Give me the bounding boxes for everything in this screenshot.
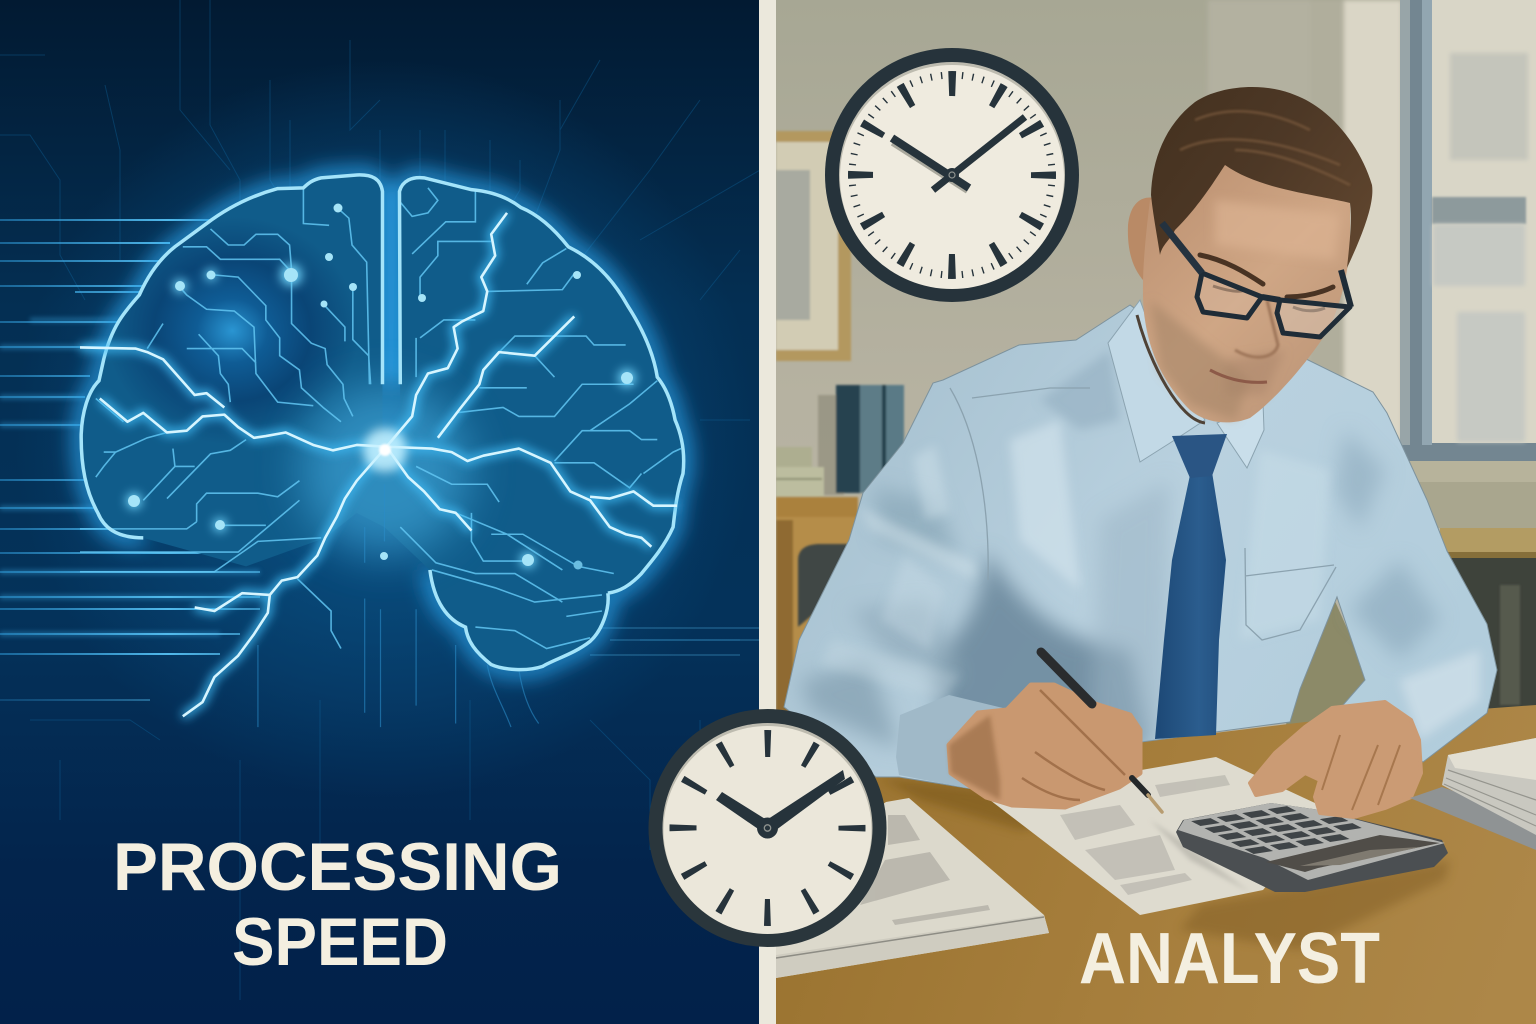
eyeglasses — [1162, 223, 1351, 337]
eyes — [1213, 286, 1325, 311]
panel: processing speed background — [0, 0, 760, 1024]
clock: top wall clock — [825, 48, 1079, 302]
brain outline — [81, 175, 684, 670]
shirt — [784, 305, 1497, 790]
illustration: glowing circuit brain — [80, 175, 684, 727]
paper stack right — [1410, 738, 1536, 850]
hair — [1151, 87, 1372, 268]
title: processing speed — [113, 829, 562, 980]
paper stack left — [776, 798, 1049, 978]
document under hands — [986, 757, 1330, 915]
brain outer glow — [81, 175, 684, 670]
hour ticks — [860, 84, 1044, 266]
window — [1400, 0, 1536, 461]
analyst figure — [784, 87, 1497, 790]
circuit traces — [80, 188, 681, 649]
minute ticks — [852, 75, 1052, 275]
face — [1128, 160, 1350, 423]
necktie — [1155, 434, 1227, 739]
office chair — [798, 544, 848, 627]
divider strip — [759, 0, 776, 1024]
brain fill — [81, 175, 684, 670]
faint background circuit traces — [0, 0, 760, 1000]
lightning bolts — [80, 213, 677, 716]
eyebrows — [1200, 255, 1333, 297]
framed picture — [776, 131, 851, 361]
calculator — [1176, 803, 1448, 892]
office wall — [776, 0, 1536, 800]
mouth — [1210, 370, 1267, 382]
hand writing — [949, 685, 1140, 807]
central energy glow — [300, 385, 470, 555]
wooden cabinet — [776, 497, 858, 820]
shirt collar — [1108, 300, 1264, 468]
clock: lower overlapping clock — [648, 709, 886, 947]
left shirt cuff — [896, 695, 1003, 790]
lower stem and faded circuit traces — [258, 484, 539, 727]
nose — [1235, 300, 1278, 357]
title: processing speed: SPEED — [232, 904, 448, 980]
curtain — [1208, 0, 1402, 440]
neck shadow line — [1137, 315, 1205, 423]
shirt seams and pocket — [950, 388, 1336, 640]
desk — [776, 705, 1536, 1024]
title: processing speed: PROCESSING — [113, 829, 562, 905]
pen — [1041, 652, 1162, 812]
shirt shading folds — [800, 350, 1480, 790]
wall gap between torso and arm — [1285, 590, 1370, 730]
face shading — [1150, 200, 1340, 420]
ear — [1128, 197, 1155, 287]
stacked books — [776, 447, 824, 497]
speed lines behind brain — [0, 220, 760, 700]
clock hands — [892, 117, 1025, 190]
calculator keys — [1196, 804, 1374, 852]
glowing circuit nodes — [126, 204, 636, 570]
panel: analyst office scene — [776, 0, 1536, 1024]
blue binders — [818, 385, 904, 495]
hand on calculator — [1250, 702, 1421, 817]
hour ticks — [683, 744, 852, 912]
lightning core spark — [363, 428, 407, 472]
clock hands — [716, 770, 845, 838]
title: analyst: ANALYST — [1079, 919, 1380, 999]
window sill, ledge and radiator — [1400, 461, 1536, 718]
